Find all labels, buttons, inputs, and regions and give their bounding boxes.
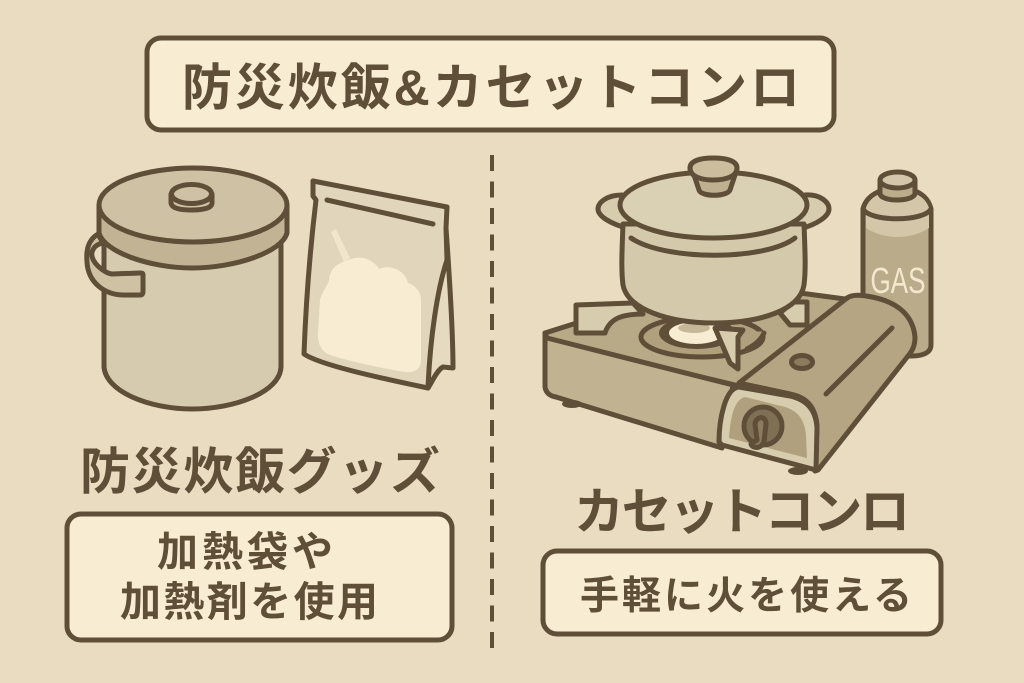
trivets: [576, 303, 643, 333]
panel: 加熱袋や加熱剤を使用: 加熱袋や: [157, 529, 333, 575]
rice in bag: [318, 258, 421, 372]
title: 防災炊飯&カセットコンロ: [182, 60, 800, 116]
panel: 手軽に火を使える: [543, 551, 941, 634]
center dashed divider: [490, 155, 494, 652]
icon: gas canister: GAS: [870, 260, 926, 301]
panel: 手軽に火を使える: 手軽に火を使える: [580, 575, 912, 618]
burner: [641, 317, 763, 357]
stove feet: [562, 400, 582, 408]
icon: rice pot: [87, 168, 287, 409]
heading: カセットコンロ: カセットコンロ: [574, 484, 910, 540]
panel: 加熱袋や加熱剤を使用: [67, 514, 452, 640]
heading: 防災炊飯グッズ: 防災炊飯グッズ: [80, 444, 440, 500]
icon: cassette stove: [545, 158, 915, 475]
icon: gas canister: [863, 172, 931, 356]
stove right cartridge cover: [739, 295, 915, 471]
cooking pot: [598, 195, 829, 229]
stove top: [545, 293, 860, 387]
pot handle: [87, 234, 143, 295]
panel: 加熱袋や加熱剤を使用: 加熱剤を使用: [120, 579, 378, 625]
stove knob: [744, 407, 782, 445]
title: [147, 38, 834, 130]
icon: heating bag: [304, 181, 453, 388]
